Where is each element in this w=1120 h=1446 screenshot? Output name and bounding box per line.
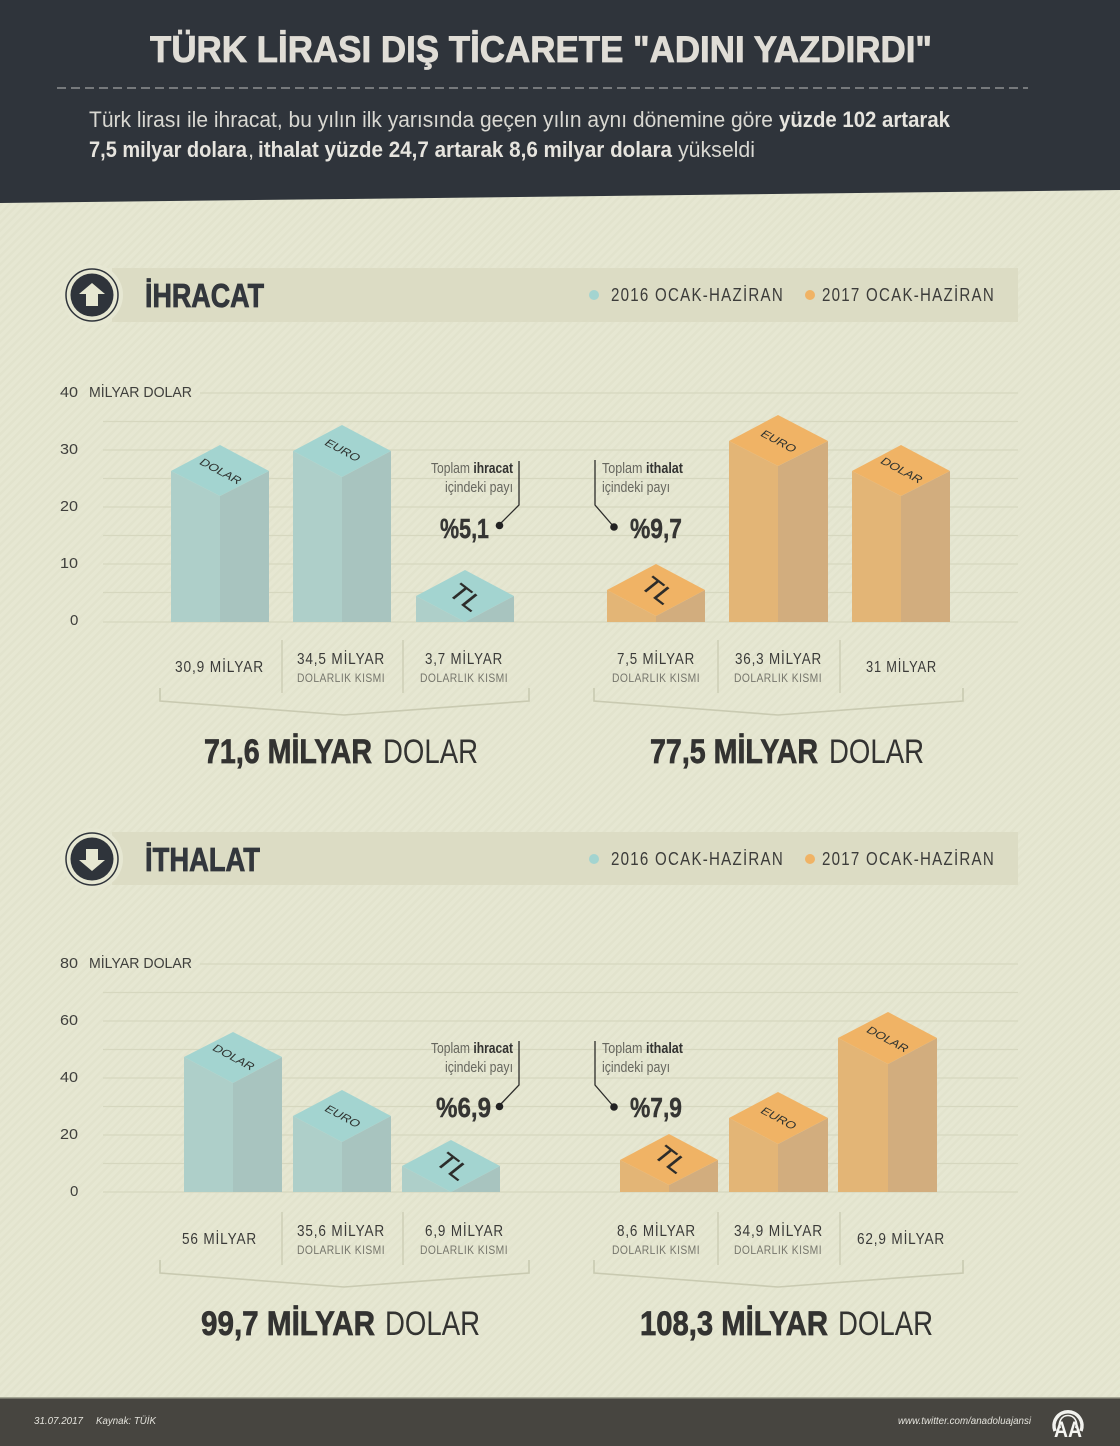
breakdown: ithalat 2016: 56 MİLYAR [182,1229,257,1248]
callout: ithalat share 7,9: Toplam ithalat [602,1040,683,1057]
section header: ihracat [61,264,1018,326]
section title: İTHALAT [145,841,260,878]
breakdown: ithalat 2016 [160,1212,529,1343]
bar: dolar 2017: DOLAR [877,455,926,486]
y axis labels: 0 [70,1183,78,1200]
bar: dolar 2016: DOLAR [196,456,245,487]
callout: ithalat share 9,7: içindeki payı [602,479,670,496]
bar: dolar 2016: DOLAR [209,1042,258,1073]
breakdown: ithalat 2017: DOLARLIK KISMI [734,1243,822,1257]
y axis labels: 10 [60,555,78,572]
legend: 2017 OCAK-HAZİRAN [822,849,995,869]
callout: ihracat share 5,1: Toplam ihracat [431,460,513,477]
chart: ithalat [60,954,1018,1200]
breakdown: ihracat 2016: DOLARLIK KISMI [297,671,385,685]
header panel [0,0,1120,203]
bar: dolar 2017: DOLAR [863,1024,912,1055]
title: TÜRK LİRASI DIŞ TİCARETE "ADINI YAZDIRDI" [150,29,932,70]
callout: ihracat share 5,1: %5,1 [440,513,489,544]
y axis labels: MİLYAR DOLAR [89,383,192,401]
breakdown: ihracat 2016 [160,640,529,771]
bar: dolar 2017 [852,445,950,622]
y axis labels: 20 [60,1126,78,1143]
callout: ihracat share 6,9: Toplam ihracat [431,1040,513,1057]
bar: euro 2017: EURO [758,1105,800,1132]
summary text: Türk lirası ile ihracat, bu yılın ilk yarısında geçen yılın aynı dönemine göre [89,107,773,132]
callout: ihracat share 6,9: içindeki payı [445,1059,513,1076]
breakdown: ihracat 2017: DOLARLIK KISMI [612,671,700,685]
total: 77,5: 77,5 MİLYAR [650,733,818,771]
legend [589,285,995,305]
y axis labels: 40 [60,1069,78,1086]
total: 108,3: 108,3 MİLYAR [640,1305,828,1343]
icon: agency logo: AA [1054,1417,1082,1442]
icon: up arrow [61,264,123,326]
callout: ithalat share 7,9 [595,1040,683,1123]
y axis labels [60,383,192,629]
callout: ithalat share 9,7: Toplam ithalat [602,460,683,477]
y axis labels: 60 [60,1012,78,1029]
breakdown: ihracat 2016: DOLARLIK KISMI [420,671,508,685]
bar: tl 2017 [620,1134,718,1192]
bar: tl 2016: TL [442,579,490,616]
callout: ihracat share 6,9 [431,1040,519,1123]
y axis labels: 0 [70,612,78,629]
bar: tl 2016 [416,570,514,622]
bar: tl 2016: TL [429,1148,477,1185]
callout: ithalat share 9,7: %9,7 [630,513,682,544]
breakdown: ithalat 2017 [594,1212,963,1343]
icon: down arrow [61,828,123,890]
bar: dolar 2016 [171,445,269,622]
summary text: ithalat yüzde 24,7 artarak 8,6 milyar dolara [258,137,673,162]
section title: İHRACAT [145,277,264,314]
bar: euro 2017: EURO [758,428,800,455]
bar: euro 2017 [729,1092,828,1192]
y axis labels: MİLYAR DOLAR [89,954,192,972]
breakdown: ihracat 2017: 36,3 MİLYAR [735,649,822,668]
y axis labels: 80 [60,955,78,972]
date and source: 31.07.2017 [34,1416,83,1427]
breakdown: ihracat 2016: 3,7 MİLYAR [425,649,503,668]
total: 71,6: DOLAR [383,733,478,771]
callout: ihracat share 6,9: %6,9 [436,1092,491,1123]
legend [589,849,995,869]
summary text [89,107,951,162]
breakdown: ihracat 2017: 7,5 MİLYAR [617,649,695,668]
bar: euro 2016: EURO [322,1103,364,1130]
breakdown: ithalat 2016: DOLARLIK KISMI [420,1243,508,1257]
summary text: yüzde 102 artarak [779,107,951,132]
total: 77,5: DOLAR [829,733,924,771]
breakdown: ithalat 2016: 35,6 MİLYAR [297,1221,385,1240]
breakdown: ihracat 2017: DOLARLIK KISMI [734,671,822,685]
chart: ihracat [60,383,1018,629]
bar: tl 2017: TL [634,572,682,609]
bar: euro 2017 [729,415,828,622]
y axis labels: 30 [60,441,78,458]
legend: 2016 OCAK-HAZİRAN [611,285,784,305]
date and source: Kaynak: TÜİK [96,1415,157,1427]
callout: ithalat share 9,7 [595,460,683,544]
legend: 2016 OCAK-HAZİRAN [611,849,784,869]
section header: ithalat [61,828,1018,890]
y axis labels [60,954,192,1200]
total: 108,3: DOLAR [838,1305,933,1343]
breakdown: ithalat 2017: 8,6 MİLYAR [617,1221,696,1240]
legend: 2017 OCAK-HAZİRAN [822,285,995,305]
breakdown: ithalat 2017: DOLARLIK KISMI [612,1243,700,1257]
summary text: yükseldi [678,137,755,162]
bar: euro 2016: EURO [322,437,364,464]
breakdown: ihracat 2016: 30,9 MİLYAR [175,657,264,676]
y axis labels: 20 [60,498,78,515]
breakdown: ithalat 2017: 62,9 MİLYAR [857,1229,945,1248]
summary text: , [248,137,254,162]
social link: www.twitter.com/anadoluajansi [898,1416,1032,1427]
breakdown: ithalat 2016: DOLARLIK KISMI [297,1243,385,1257]
y axis labels: 40 [60,384,78,401]
total: 71,6: 71,6 MİLYAR [204,733,372,771]
bar: dolar 2016 [184,1032,282,1192]
total: 99,7: 99,7 MİLYAR [201,1305,375,1343]
breakdown: ithalat 2017: 34,9 MİLYAR [734,1221,823,1240]
breakdown: ihracat 2017 [594,640,963,771]
summary text: 7,5 milyar dolara [89,137,248,162]
breakdown: ithalat 2016: 6,9 MİLYAR [425,1221,504,1240]
bar: dolar 2017 [838,1012,937,1192]
bar: euro 2016 [293,425,391,622]
footer [0,1397,1120,1446]
bar: tl 2017 [607,564,705,622]
date and source [34,1415,157,1427]
bar: euro 2016 [293,1090,391,1192]
callout: ihracat share 5,1 [431,460,519,544]
bar: tl 2017: TL [647,1141,695,1178]
total: 99,7: DOLAR [385,1305,480,1343]
breakdown: ihracat 2017: 31 MİLYAR [866,657,937,676]
bar: tl 2016 [402,1140,500,1192]
callout: ithalat share 7,9: %7,9 [630,1092,682,1123]
callout: ihracat share 5,1: içindeki payı [445,479,513,496]
breakdown: ihracat 2016: 34,5 MİLYAR [297,649,385,668]
callout: ithalat share 7,9: içindeki payı [602,1059,670,1076]
